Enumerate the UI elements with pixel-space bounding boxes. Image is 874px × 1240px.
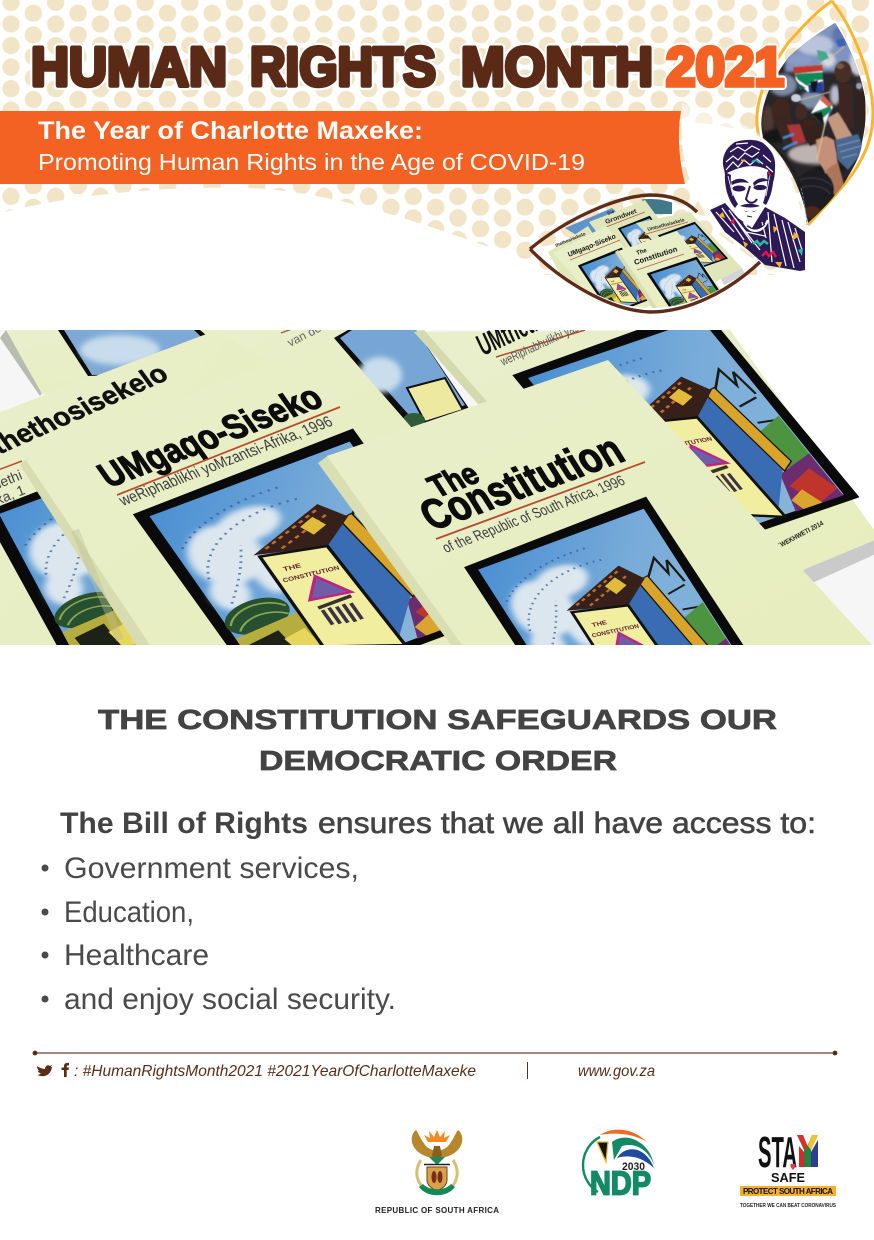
icon: facebook (62, 1063, 69, 1077)
logo: Stay Safe: SAFE (771, 1170, 805, 1185)
rear-centre book (280, 330, 468, 428)
orange banner (0, 111, 685, 184)
bullet list (42, 852, 396, 1016)
mini book: Die Grondwet: Grondwet (604, 208, 639, 226)
back-right book: UMthetho (472, 299, 557, 362)
heading: THE CONSTITUTION SAFEGUARDS OUR (98, 704, 777, 735)
mini book: thethosisekelo: thethosisekelo (555, 231, 586, 248)
patterned dress (710, 203, 805, 271)
main title: RIGHTS (250, 36, 436, 98)
bullet list: Government services, (64, 852, 359, 885)
crowd photo (761, 23, 866, 223)
main title: HUMAN (31, 36, 227, 98)
logo: Stay Safe: STA (758, 1128, 797, 1177)
hashtags: : #HumanRightsMonth2021 #2021YearOfCharlotteMaxeke (74, 1063, 476, 1080)
rear-centre book: van de (285, 321, 324, 350)
mini book: UMgaqo-Siseko: UMgaqo-Siseko (567, 233, 617, 259)
mini book: thethosisekelo (548, 226, 596, 294)
year: 2021 (666, 36, 784, 98)
mini book: The Constitution: Constitution (633, 244, 679, 267)
mini book: The Constitution: The (636, 248, 648, 257)
main title: MONTH (461, 36, 653, 98)
back-right book: KWEKHWETI 2014 (776, 520, 825, 551)
eye: miniature books (530, 195, 760, 323)
photo: constitution books (0, 330, 874, 645)
website: www.gov.za (578, 1063, 655, 1080)
intro sentence (60, 807, 816, 840)
book title: UMgaqo-Siseko: UMgaqo-Siseko (90, 377, 330, 495)
mini book: Umtsetfosisekelo: Umtsetfosisekelo (647, 217, 685, 233)
book: The Constitution: of the Republic of South Africa, 1996 (439, 473, 628, 556)
book title: The Constitution: Constitution (411, 426, 633, 540)
banner subtitle: Promoting Human Rights in the Age of COVID-19 (38, 149, 585, 175)
bullet list: and enjoy social security. (64, 983, 396, 1016)
face (725, 167, 773, 219)
main title: 2021 (666, 36, 784, 98)
mini book: UMgaqo-Siseko (553, 226, 651, 308)
book: UMgaqo-Siseko: weRiphablikhi yoMzantsi-Afrika, 1996 (115, 413, 336, 510)
icon: twitter (37, 1065, 52, 1076)
leaf: white portrait leaf (681, 103, 808, 275)
main title: HUMAN (31, 36, 227, 98)
portrait: Charlotte Maxeke (708, 140, 806, 272)
flag: South Africa large (793, 65, 824, 93)
back-right book: weRiphabhulikhi yaseNingizimu (498, 301, 622, 369)
heading (98, 704, 777, 776)
header background: dot pattern (0, 0, 874, 330)
logo: Stay Safe: TOGETHER WE CAN BEAT CORONAVIRUS (740, 1203, 836, 1209)
book: The Constitution (318, 360, 872, 645)
book title: The Constitution: The (421, 456, 486, 504)
bullet list: Healthcare (64, 939, 209, 972)
logo: Stay Safe: PROTECT SOUTH AFRICA (743, 1187, 833, 1196)
back-right book (414, 330, 874, 582)
book: Umthethosisekelo (0, 334, 248, 645)
heading: DEMOCRATIC ORDER (259, 745, 617, 776)
banner title: The Year of Charlotte Maxeke: (38, 117, 423, 145)
mini book: The Constitution (615, 231, 721, 308)
mini book: Die Grondwet (589, 200, 658, 248)
footer rule (33, 1051, 837, 1055)
mini book: Die Grondwet: Die (607, 209, 615, 216)
flag: South Africa small (811, 95, 833, 127)
intro sentence: The Bill of Rights (60, 807, 308, 840)
book: UMgaqo-Siseko (20, 367, 451, 645)
bullet list: Education, (64, 896, 194, 929)
logo: NDP 2030: NDP (590, 1164, 651, 1202)
logo label: REPUBLIC OF SOUTH AFRICA (375, 1206, 499, 1215)
main title (31, 36, 784, 98)
logo: NDP 2030: 2030 (622, 1161, 645, 1173)
headwrap (723, 140, 775, 186)
intro sentence: ensures that we all have access to: (318, 807, 816, 840)
logo: Stay Safe (740, 1128, 836, 1209)
main title: MONTH (461, 36, 653, 98)
rear-left book (0, 330, 270, 396)
leaf: crowd photo with yellow outline (750, 1, 874, 230)
logo: NDP 2030 (583, 1130, 655, 1202)
logo: coat of arms (412, 1130, 462, 1195)
main title: RIGHTS (250, 36, 436, 98)
mini book: Umtsetfosisekelo (636, 212, 745, 290)
book title: The Constitution (421, 441, 626, 528)
